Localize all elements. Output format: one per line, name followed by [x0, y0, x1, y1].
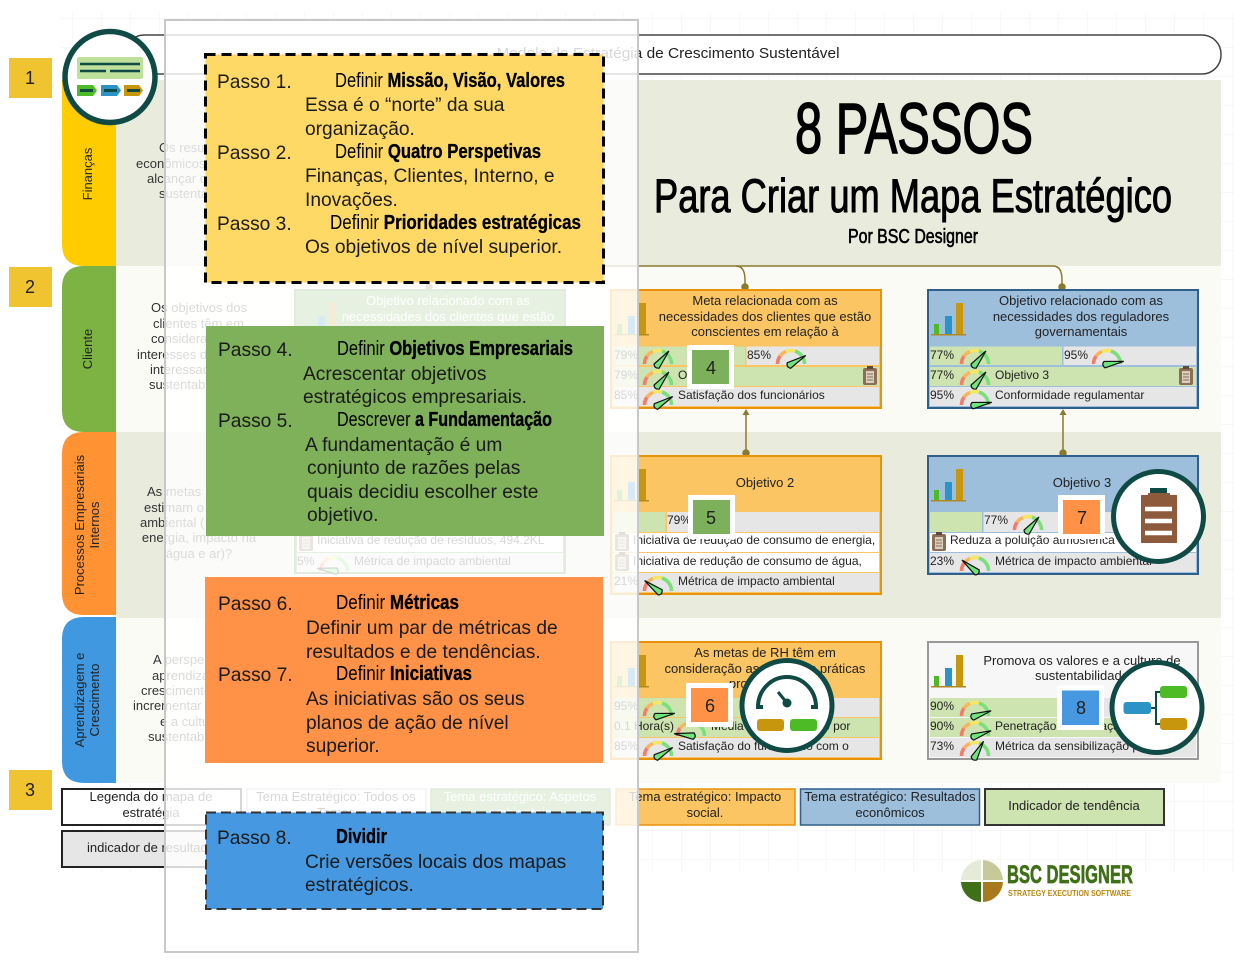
card: meta clientes conscientes: Objetivo 1	[678, 368, 732, 382]
perspective description: aprendizagem: aprendizagem e	[152, 668, 245, 683]
step panel: passos 6 e 7: Definir Iniciativas	[336, 663, 472, 685]
card: metas de RH: 0.1 Hora(s)	[614, 719, 674, 733]
card: objetivo clientes (ambiental): necessidades dos clientes que estão	[342, 309, 554, 324]
card: objetivo reguladores governamentais: Conformidade regulamentar	[995, 388, 1144, 402]
card: objetivo 2: 21%	[614, 574, 638, 588]
step panel: passos 6 e 7: Definir um par de métricas de	[306, 618, 558, 639]
card: objetivo reguladores governamentais	[928, 290, 1198, 409]
step panel: passos 6 e 7: resultados e de tendências.	[306, 642, 541, 663]
card: metas de RH: Satisfação do funcionário com o	[678, 739, 849, 753]
step panel: passos 1 a 3: Inovações.	[305, 190, 398, 211]
perspective description: aprendizagem: A perspectiva de	[153, 652, 249, 667]
number badge 5: 5	[706, 508, 716, 528]
title block	[654, 90, 1172, 248]
step panel: passos 6 e 7: planos de ação de nível	[306, 713, 509, 734]
card: metas de RH: Média de tempo gasto por	[711, 719, 850, 733]
tab: Aprendizagem e Crescimento: Aprendizagem e	[72, 653, 87, 747]
step panel: passos 1 a 3: Passo 1.	[217, 72, 292, 93]
card: objetivo 3: 77%	[984, 513, 1008, 527]
number badge 5	[690, 498, 732, 536]
step panel: passos 1 a 3: Definir Quatro Perspetivas	[335, 141, 541, 163]
card: objetivo 2	[611, 456, 881, 596]
card: meta clientes conscientes: conscientes em relação à	[691, 324, 839, 339]
perspective description: cliente	[137, 300, 248, 392]
step panel: passos 1 a 3: Essa é o “norte” da sua	[305, 95, 505, 116]
card: metas de RH: consideração as melhores práticas	[665, 661, 866, 676]
section badge 2	[9, 267, 52, 307]
card: metas de RH: 95%	[614, 699, 638, 713]
step panel: passo 8: estratégicos.	[305, 875, 414, 896]
perspective background bands	[116, 80, 1221, 783]
legend: indicador de resultado	[87, 840, 215, 855]
step panel: passos 1 a 3: Definir Prioridades estratégicas	[330, 212, 581, 234]
perspective description: processos: energia, impacto na	[142, 530, 257, 545]
card: promova valores e cultura: 90%	[930, 719, 954, 733]
number badge 6: 6	[705, 696, 715, 716]
number badge 7: 7	[1077, 508, 1087, 528]
section badge 3	[9, 770, 52, 810]
perspective description: processos: água e ar)?	[166, 546, 232, 561]
step panel: passos 4 e 5: Descrever a Fundamentação	[337, 409, 552, 431]
legend: econômicos	[855, 805, 925, 820]
perspective description: cliente: interesses das	[137, 347, 221, 362]
section badge 1	[9, 58, 52, 98]
card: objetivo clientes (ambiental)	[295, 290, 565, 407]
legend: ambientais	[489, 805, 552, 820]
title block: 8 PASSOS	[795, 90, 1033, 169]
number badge 4	[690, 348, 732, 386]
perspective description: aprendizagem	[133, 652, 249, 744]
card: objetivo 3: Objetivo 3	[1053, 475, 1111, 490]
step panel: passos 1 a 3: Passo 2.	[217, 143, 292, 164]
perspective description: finanças	[136, 140, 258, 201]
perspective description: processos: As metas	[147, 484, 202, 499]
logo: BSC Designer	[961, 860, 1133, 902]
perspective description: aprendizagem: incrementar valores	[133, 698, 248, 713]
card: meta clientes conscientes: 85%	[614, 388, 638, 402]
step panel: passos 4 e 5: Passo 5.	[218, 411, 293, 432]
step panel: passos 4 e 5: quais decidiu escolher este	[307, 482, 538, 503]
perspective description: cliente: Os objetivos dos	[151, 300, 248, 315]
card: meta clientes conscientes: 79%	[614, 368, 638, 382]
card: objetivo clientes (ambiental): Objetivo relacionado com as	[366, 293, 531, 308]
step panel: passos 1 a 3	[206, 54, 604, 282]
card: objetivo 3: Reduza a poluição atmosférica	[950, 533, 1115, 547]
card: meta clientes conscientes: Meta relacionada com as	[692, 293, 838, 308]
step panel: passo 8: Dividir	[336, 826, 387, 848]
card: promova valores e cultura: 90%	[930, 699, 954, 713]
perspective description: finanças: Os resultados	[159, 140, 240, 155]
card: objetivo reguladores governamentais: Objetivo 3	[995, 368, 1049, 382]
icon: clipboard circle	[1114, 472, 1204, 562]
icon: metrics gauge circle	[742, 660, 832, 750]
card: promova valores e cultura: Promova os valores e a cultura de	[983, 653, 1181, 668]
card: promova valores e cultura: Métrica da sensibilização para	[995, 739, 1157, 753]
card: promova valores e cultura: 73%	[930, 739, 954, 753]
perspective description: cliente: clientes têm em	[153, 316, 244, 331]
step panel: passos 6 e 7: Passo 6.	[218, 594, 293, 615]
tab: Processos Empresariais Internos: Processos Empresariais	[72, 454, 87, 595]
step panel: passos 1 a 3: Definir Missão, Visão, Valores	[335, 70, 565, 92]
tab: Aprendizagem e Crescimento	[62, 617, 116, 783]
step panel: passos 4 e 5: estratégicos empresariais.	[303, 387, 527, 408]
step panel: passos 6 e 7: superior.	[306, 736, 380, 757]
card: meta clientes conscientes: 85%	[747, 348, 771, 362]
number badge 4: 4	[706, 358, 716, 378]
card: meta clientes conscientes: necessidades dos clientes que estão	[659, 309, 871, 324]
card: objetivo 1 (ambiental), lower rows: 5%	[297, 554, 315, 568]
number badge 8: 8	[1076, 698, 1086, 718]
card: metas de RH: As metas de RH têm em	[694, 645, 836, 660]
step panel: passo 8: Crie versões locais dos mapas	[305, 852, 566, 873]
section badge 3: 3	[25, 780, 35, 800]
perspective description: finanças: alcançar o sucesso	[147, 171, 258, 186]
card: objetivo reguladores governamentais: 95%	[1064, 348, 1088, 362]
perspective description: cliente: interessadas	[150, 362, 224, 377]
step panel: passos 1 a 3: Os objetivos de nível superior.	[305, 237, 562, 258]
perspective description: aprendizagem: e a cultura de	[160, 714, 239, 729]
legend: Temas	[317, 805, 356, 820]
card: objetivo reguladores governamentais: 77%	[930, 368, 954, 382]
translucent white overlay panel	[165, 20, 638, 952]
step panel: passos 4 e 5: conjunto de razões pelas	[307, 458, 520, 479]
step panel: passos 1 a 3: Passo 3.	[217, 214, 292, 235]
section badge 1: 1	[25, 68, 35, 88]
step panel: passos 4 e 5: Passo 4.	[218, 340, 293, 361]
perspective description: aprendizagem: crescimento visa	[141, 683, 239, 698]
card: objetivo reguladores governamentais: 77%	[930, 348, 954, 362]
legend: Tema Estratégico: Todos os	[256, 789, 416, 804]
card: objetivo 3: Métrica de impacto ambiental	[995, 554, 1152, 568]
card: objetivo reguladores governamentais: necessidades dos reguladores	[993, 309, 1170, 324]
perspective description: aprendizagem: sustentabilidade	[148, 729, 242, 744]
card: promova valores e cultura: sustentabilidade	[1035, 668, 1129, 683]
perspective description: processos: estimam o	[144, 500, 204, 515]
icon: split tree circle	[1112, 662, 1202, 752]
tab: Processos Empresariais Internos: Internos	[87, 501, 102, 548]
perspective description: finanças: sustentável	[159, 186, 225, 201]
legend: Tema estratégico: Impacto	[629, 789, 781, 804]
step panel: passos 1 a 3: Finanças, Clientes, Interno, e	[305, 166, 555, 187]
perspective description: processos: ambiental (	[140, 515, 205, 530]
card: promova valores e cultura	[928, 642, 1198, 761]
card: objetivo reguladores governamentais: governamentais	[1035, 324, 1128, 339]
card: metas de RH	[611, 642, 881, 761]
title block: Por BSC Designer	[848, 226, 978, 248]
legend	[62, 789, 1164, 867]
tab: Processos Empresariais Internos	[62, 432, 116, 615]
legend: Indicador de tendência	[1008, 798, 1141, 813]
connector lines between objectives	[420, 266, 1066, 456]
tab: Aprendizagem e Crescimento: Crescimento	[87, 664, 102, 736]
tab: Finanças	[62, 80, 116, 266]
tab: Cliente	[62, 266, 116, 432]
icon: strategy map circle	[65, 32, 155, 122]
step panel: passos 4 e 5: A fundamentação é um	[305, 435, 502, 456]
number badge 7	[1060, 498, 1102, 536]
step panel: passos 6 e 7: As iniciativas são os seus	[306, 689, 525, 710]
card: objetivo 1 (ambiental), lower rows	[295, 456, 565, 575]
card: metas de RH: profissionais	[729, 676, 802, 691]
step panel: passos 1 a 3: organização.	[305, 119, 415, 140]
logo: BSC Designer: STRATEGY EXECUTION SOFTWARE	[1008, 889, 1132, 898]
step panel: passos 6 e 7: Passo 7.	[218, 665, 293, 686]
tab: Finanças: Finanças	[80, 147, 95, 200]
card: objetivo 2: Métrica de impacto ambiental	[678, 574, 835, 588]
legend: social.	[687, 805, 723, 820]
step panel: passos 6 e 7: Definir Métricas	[336, 592, 459, 614]
legend: Tema estratégico: Resultados	[804, 789, 976, 804]
step panel: passos 6 e 7	[205, 577, 603, 763]
card: promova valores e cultura: Penetração da formação	[995, 719, 1127, 733]
perspective description: cliente: consideração os	[151, 331, 246, 346]
step panel: passos 4 e 5: Definir Objetivos Empresariais	[337, 338, 573, 360]
step panel: passos 4 e 5	[206, 326, 604, 536]
logo: BSC Designer: BSC DESIGNER	[1007, 861, 1133, 889]
card: meta clientes conscientes: Satisfação dos funcionários	[678, 388, 825, 402]
card: objetivo 2: Iniciativa de redução de consumo de água,	[633, 554, 862, 568]
number badge 8	[1060, 688, 1102, 728]
section badge 2: 2	[25, 277, 35, 297]
perspective description: cliente: sustentabilidade	[149, 377, 243, 392]
legend: Tema estratégico: Aspetos	[444, 789, 597, 804]
step panel: passo 8: Passo 8.	[217, 828, 292, 849]
legend: estratégia	[122, 805, 180, 820]
step panel: passo 8	[206, 812, 603, 909]
card: metas de RH: 85%	[614, 739, 638, 753]
card: objetivo 2: Iniciativa de redução de consumo de energia,	[633, 533, 875, 547]
card: objetivo 2: 79%	[667, 513, 691, 527]
step panel: passos 4 e 5: Acrescentar objetivos	[303, 364, 486, 385]
card: objetivo reguladores governamentais: 95%	[930, 388, 954, 402]
tab: Cliente: Cliente	[80, 329, 95, 369]
title bar: strategy map name: Modelo de Estratégia de Crescimento Sustentável	[496, 45, 840, 62]
card: objetivo 3	[928, 456, 1198, 576]
card: objetivo 1 (ambiental), lower rows: Métrica de impacto ambiental	[354, 554, 511, 568]
title bar: strategy map name	[125, 35, 1221, 74]
perspective description: finanças: econômicos para	[136, 156, 236, 171]
card: objetivo 1 (ambiental), lower rows: Iniciativa de redução de resíduos, 494.2KL	[317, 533, 545, 547]
step panel: passos 4 e 5: objetivo.	[307, 505, 378, 526]
card: objetivo 2: Objetivo 2	[736, 475, 794, 490]
card: meta clientes conscientes: 79%	[614, 348, 638, 362]
card: objetivo reguladores governamentais: Objetivo relacionado com as	[999, 293, 1164, 308]
perspective description: processos	[140, 484, 257, 561]
number badge 6	[688, 686, 730, 724]
card: meta clientes conscientes	[611, 290, 881, 410]
card: objetivo 3: 23%	[930, 554, 954, 568]
legend: Legenda do mapa de	[90, 789, 212, 804]
